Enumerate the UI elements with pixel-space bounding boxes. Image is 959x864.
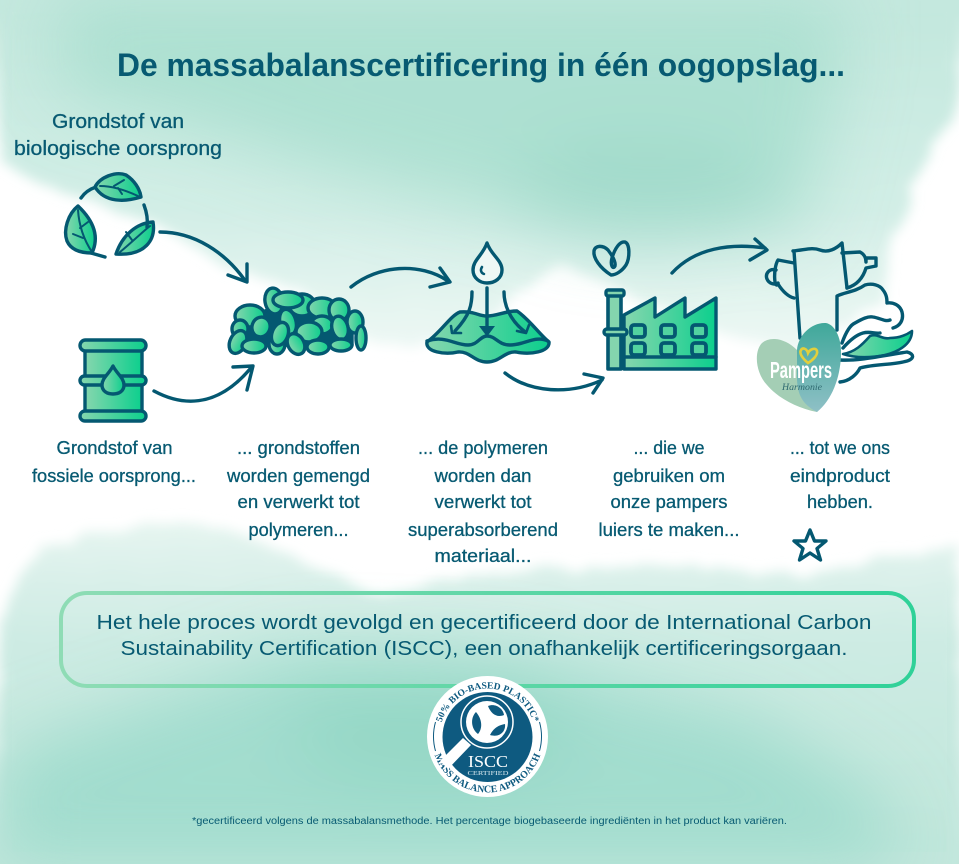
arrow: leaves to pellets: [160, 232, 247, 282]
caption: end product: ... tot we ons: [790, 438, 890, 458]
caption: step factory: luiers te maken...: [598, 520, 740, 540]
badge: ISCC certified: 50% BIO-BASED PLASTIC*: [436, 682, 539, 722]
callout: ISCC certification: Sustainability Certification (ISCC), een onafhankelijk certificeringsorgaan.: [120, 638, 848, 660]
badge: ISCC certified: MASS BALANCE APPROACH: [434, 752, 540, 792]
caption: biological raw material: Grondstof van: [52, 111, 184, 133]
caption: step superabsorbent: ... de polymeren: [418, 438, 548, 458]
caption: step superabsorbent: superabsorberend: [408, 520, 558, 540]
callout: ISCC certification: Het hele proces wordt gevolgd en gecertificeerd door de International Carbon: [96, 612, 871, 634]
icon: star: [794, 530, 826, 560]
caption: step factory: [598, 438, 740, 540]
caption: step superabsorbent: [408, 438, 558, 566]
caption: fossil raw material: fossiele oorsprong...: [32, 466, 196, 486]
icon: recycling leaves: [66, 174, 153, 257]
arrow: polymer to factory: [505, 373, 603, 393]
caption: end product: [790, 438, 890, 512]
arrow: barrel to pellets: [154, 366, 253, 401]
icon: Pampers Harmonie logo: Pampers: [770, 357, 832, 383]
icon: heart: [594, 242, 629, 275]
caption: end product: hebben.: [807, 492, 873, 512]
callout: ISCC certification: [61, 593, 914, 686]
caption: step polymers: ... grondstoffen: [237, 438, 360, 458]
badge: ISCC certified: CERTIFIED: [468, 770, 509, 777]
icon: oil barrel: [80, 340, 146, 421]
caption: step polymers: polymeren...: [248, 520, 348, 540]
footnote: *gecertificeerd volgens de massabalansmethode. Het percentage biogebaseerde ingrediënten in het product kan variëren.: [192, 816, 787, 827]
caption: step factory: ... die we: [634, 438, 704, 458]
caption: fossil raw material: Grondstof van: [56, 438, 172, 458]
caption: step polymers: worden gemengd: [226, 466, 370, 486]
caption: biological raw material: [14, 111, 222, 160]
caption: step factory: gebruiken om: [613, 466, 725, 486]
icon: factory: [604, 290, 716, 369]
caption: biological raw material: biologische oorsprong: [14, 138, 222, 160]
arrow: factory to diaper: [672, 239, 767, 273]
icon: Pampers Harmonie logo: [757, 323, 841, 412]
badge: ISCC certified: ISCC: [468, 752, 508, 771]
icon: polymer pellet pile: [226, 287, 366, 358]
caption: end product: eindproduct: [790, 466, 890, 486]
caption: step superabsorbent: worden dan: [433, 466, 532, 486]
icon: polymer with droplet: [427, 243, 549, 362]
caption: step superabsorbent: materiaal...: [434, 546, 532, 566]
caption: fossil raw material: [32, 438, 196, 486]
icon: diaper and wipes: [766, 243, 913, 382]
caption: step superabsorbent: verwerkt tot: [434, 492, 532, 512]
arrow: pellets to polymer: [351, 268, 450, 287]
caption: step factory: onze pampers: [610, 492, 728, 512]
caption: step polymers: [226, 438, 370, 540]
caption: step polymers: en verwerkt tot: [238, 492, 360, 512]
title: De massabalanscertificering in één oogopslag...: [117, 47, 845, 83]
badge: ISCC certified: [427, 676, 548, 797]
icon: Pampers Harmonie logo: Harmonie: [781, 382, 822, 392]
